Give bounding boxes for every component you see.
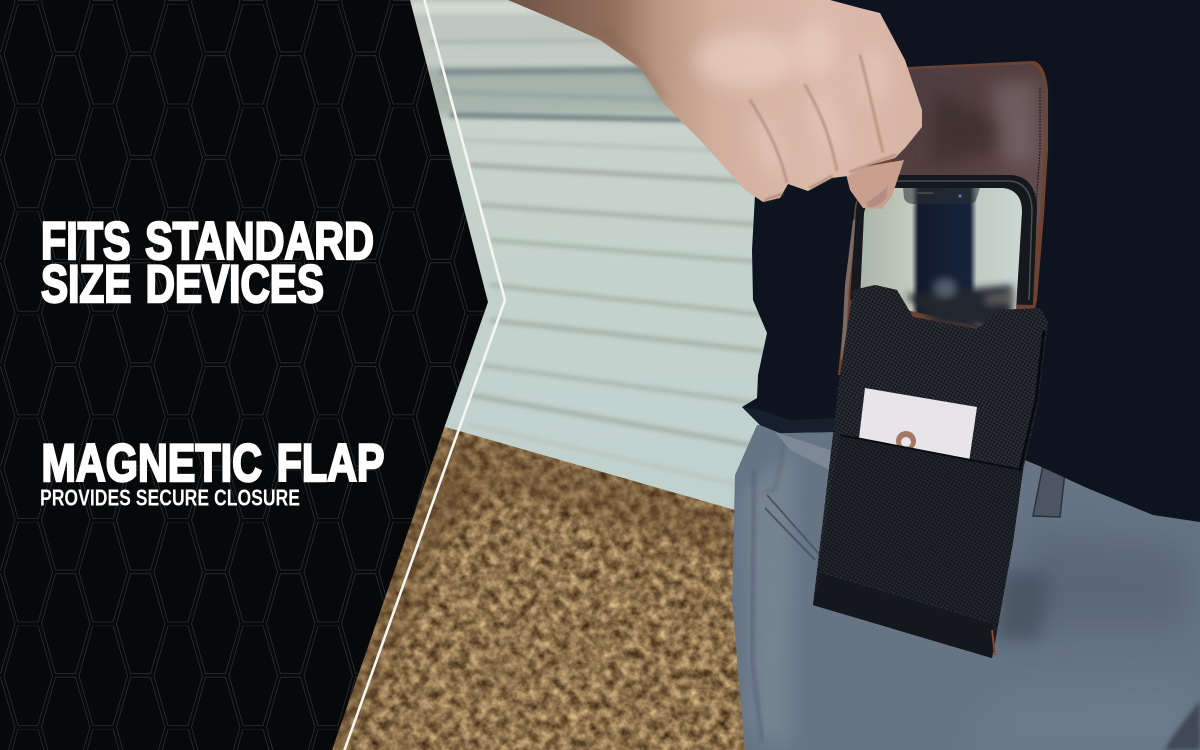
phone screen xyxy=(860,188,1022,330)
business card xyxy=(859,388,977,462)
white chevron outline arrow xyxy=(344,0,505,750)
front pocket xyxy=(813,435,1023,658)
phone case xyxy=(850,175,1037,305)
heading line two: SIZE DEVICES xyxy=(41,255,324,314)
heading line: MAGNETIC FLAP xyxy=(42,434,384,493)
back pocket stitching xyxy=(765,495,820,560)
gravel ground xyxy=(332,426,745,750)
bottom fold xyxy=(813,572,993,658)
heading: fits standard size devices xyxy=(41,212,374,314)
photo: man wearing holster xyxy=(508,0,1200,750)
phone notch xyxy=(903,188,980,204)
navy shirt xyxy=(742,0,1200,522)
phone xyxy=(850,175,1037,330)
thumb xyxy=(845,160,904,209)
leather wallet flap xyxy=(838,61,1048,375)
subheading: PROVIDES SECURE CLOSURE xyxy=(40,484,300,510)
corrugated wall xyxy=(400,0,820,520)
nylon holster xyxy=(813,285,1048,658)
photo: background wall and gravel xyxy=(332,0,767,750)
black chevron panel xyxy=(0,0,488,750)
jeans xyxy=(732,425,1200,750)
heading line one: FITS STANDARD xyxy=(41,212,374,271)
finger creases xyxy=(750,55,895,200)
hexagon line pattern xyxy=(0,0,488,750)
belt loop xyxy=(1033,460,1065,517)
hand and forearm xyxy=(508,0,922,209)
heading: magnetic flap xyxy=(40,434,384,510)
knuckle highlights xyxy=(695,32,795,88)
